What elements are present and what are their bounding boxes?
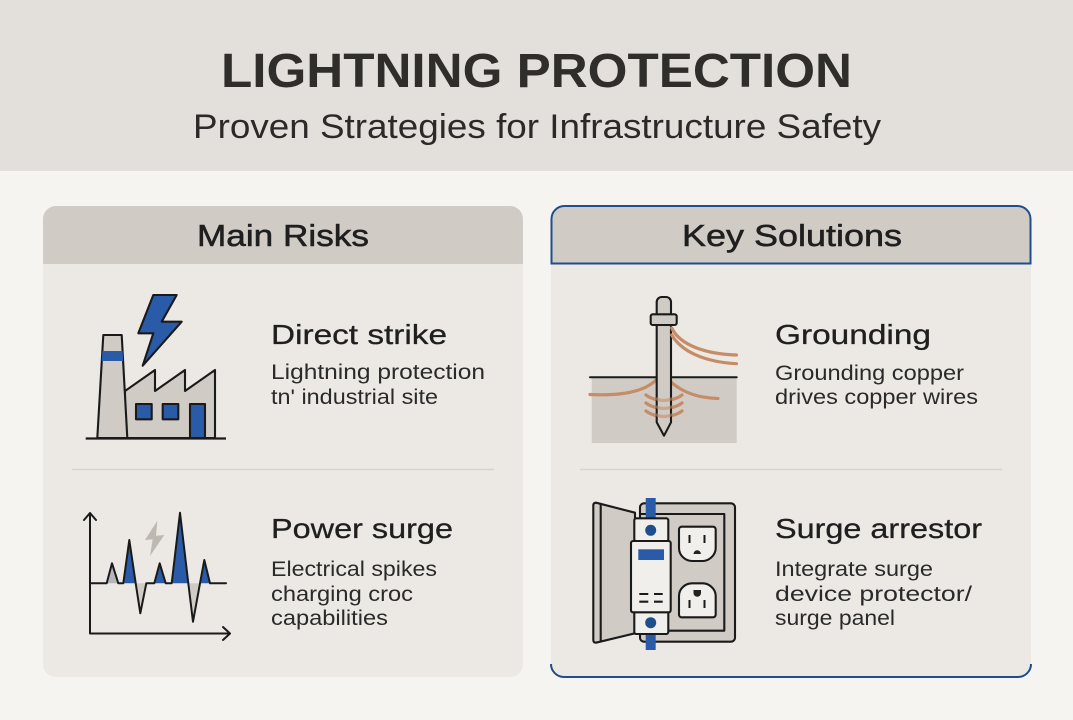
text: direct strike — [271, 319, 485, 409]
text: grounding: Grounding copper — [775, 362, 964, 385]
text: power surge: Electrical spikes — [271, 558, 437, 581]
panel heading: key solutions: Key Solutions — [682, 218, 902, 253]
panel bottom accent — [551, 664, 1031, 677]
header band — [0, 0, 1073, 171]
text: grounding: drives copper wires — [775, 386, 978, 409]
panel: main risks — [43, 206, 523, 677]
text: power surge — [271, 513, 453, 630]
text: surge arrestor: device protector/ — [775, 583, 972, 606]
panel: key solutions — [551, 206, 1031, 677]
text: surge arrestor — [775, 513, 982, 630]
text: direct strike: tn' industrial site — [271, 386, 438, 409]
icon: factory struck by lightning — [86, 295, 226, 438]
panel heading: key solutions — [552, 206, 1030, 264]
text: direct strike: Lightning protection — [271, 361, 485, 384]
panel heading: main risks — [43, 206, 523, 264]
text: surge arrestor: Surge arrestor — [775, 513, 982, 544]
text: power surge: capabilities — [271, 607, 388, 630]
subtitle: Proven Strategies for Infrastructure Safety — [193, 108, 881, 146]
icon: surge arrestor panel with outlets — [593, 498, 735, 650]
panel heading: main risks: Main Risks — [197, 218, 369, 253]
text: grounding — [775, 319, 978, 409]
text: surge arrestor: surge panel — [775, 607, 895, 630]
icon: grounding rod — [590, 297, 737, 443]
text: power surge: Power surge — [271, 513, 453, 544]
text: grounding: Grounding — [775, 319, 931, 350]
text: direct strike: Direct strike — [271, 319, 447, 350]
text: surge arrestor: Integrate surge — [775, 558, 933, 581]
icon: power surge chart — [84, 513, 230, 640]
title: LIGHTNING PROTECTION — [221, 45, 852, 98]
text: power surge: charging croc — [271, 583, 413, 606]
